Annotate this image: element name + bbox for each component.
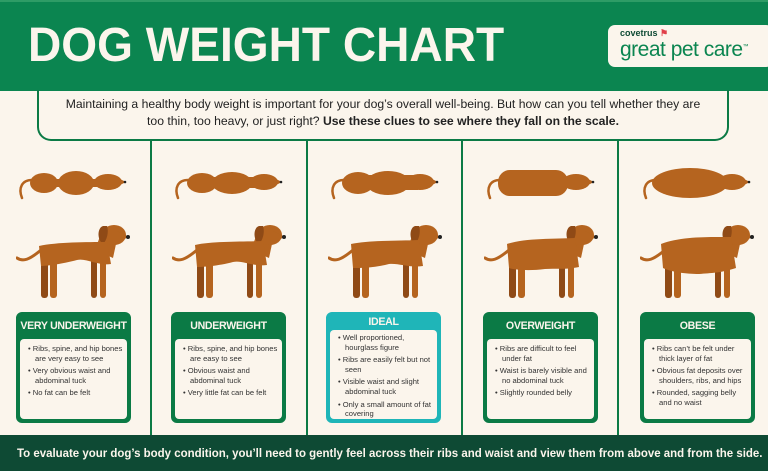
card: ideal: • Ribs are easily felt but not seen [338, 355, 430, 374]
card: overweight: • Slightly rounded belly [495, 388, 572, 397]
card: very underweight: • Ribs, spine, and hip bones are very easy to see [28, 344, 122, 363]
card: overweight: • Ribs are difficult to feel under fat [495, 344, 576, 363]
dogs: obese [640, 168, 754, 298]
card: underweight: UNDERWEIGHT [190, 320, 267, 332]
card: underweight: • Obvious waist and abdominal tuck [183, 366, 250, 385]
card: overweight: • Waist is barely visible and no abdominal tuck [495, 366, 587, 385]
card: underweight [171, 312, 286, 423]
header band [0, 0, 768, 91]
card: underweight: • Ribs, spine, and hip bones are easy to see [183, 344, 277, 363]
dogs: very underweight [16, 171, 130, 298]
card: ideal: • Visible waist and slight abdominal tuck [338, 377, 419, 396]
card: ideal: IDEAL [368, 316, 399, 328]
card: obese: • Ribs can’t be felt under thick layer of fat [652, 344, 734, 363]
logo [608, 25, 768, 67]
card: overweight [483, 312, 598, 423]
card: obese: • Obvious fat deposits over shoulders, ribs, and hips [652, 366, 742, 385]
intro text box: Maintaining a healthy body weight is important for your dog’s overall well-being. But how can you tell whether they are [66, 97, 700, 111]
logo: great pet care™ [620, 38, 748, 61]
card: very underweight [16, 312, 131, 423]
intro text box [37, 90, 729, 141]
card: overweight: OVERWEIGHT [506, 320, 575, 332]
dogs: underweight [172, 172, 286, 298]
card: very underweight: • Very obvious waist and abdominal tuck [28, 366, 110, 385]
card: ideal: • Only a small amount of fat covering [338, 400, 431, 418]
footer: To evaluate your dog’s body condition, you’ll need to gently feel across their ribs and waist and view them from above and from the side. [17, 446, 762, 460]
dogs: ideal [328, 171, 442, 298]
card: very underweight: • No fat can be felt [28, 388, 90, 397]
intro text box: too thin, too heavy, or just right? Use these clues to see where they fall on the scale. [147, 114, 619, 128]
card: underweight: • Very little fat can be felt [183, 388, 266, 397]
card: obese [640, 312, 755, 423]
card: very underweight: VERY UNDERWEIGHT [20, 320, 127, 332]
footer [0, 435, 768, 471]
dogs: overweight [484, 170, 598, 298]
card: obese: OBESE [680, 320, 715, 332]
logo: covetrus ⚑ [620, 28, 668, 38]
card: ideal: • Well proportioned, hourglass figure [338, 333, 404, 352]
card: obese: • Rounded, sagging belly and no waist [652, 388, 736, 407]
card: ideal [326, 312, 441, 423]
title: DOG WEIGHT CHART [28, 19, 504, 72]
